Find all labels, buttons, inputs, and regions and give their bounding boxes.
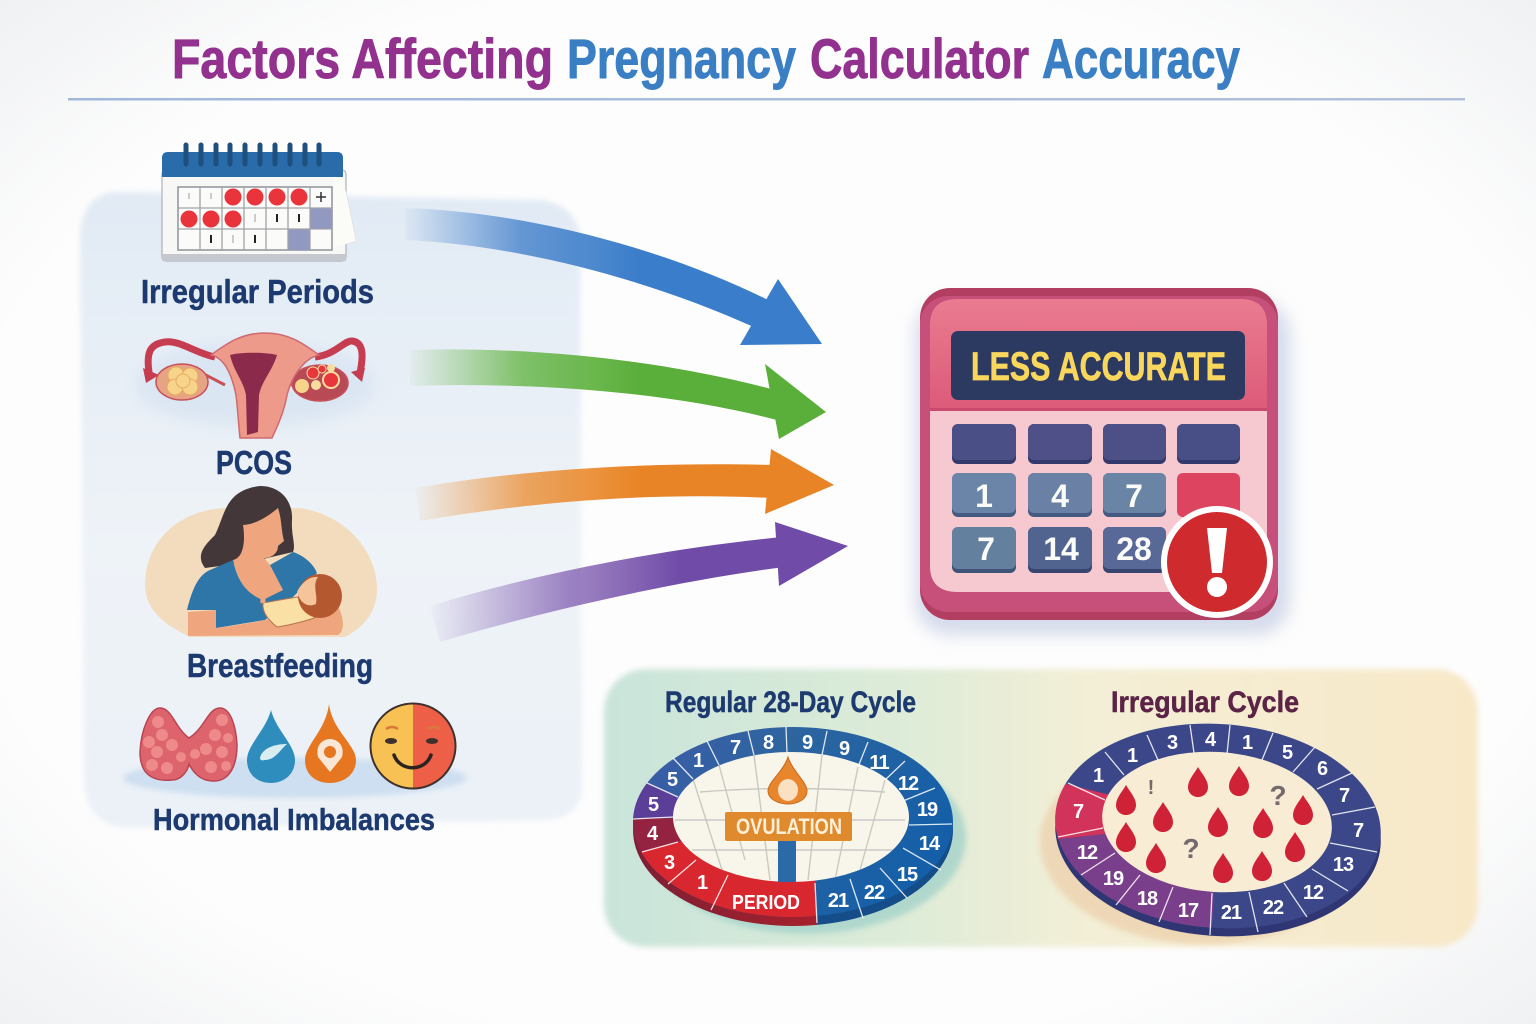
- icons: hormonal imbalance: [123, 703, 467, 798]
- calculator keys: [952, 424, 1240, 573]
- ring numbers: 5: [1282, 742, 1293, 764]
- ring numbers: 14: [919, 833, 941, 855]
- ring numbers: 9: [839, 738, 850, 760]
- title: Calculator: [810, 27, 1029, 90]
- ring numbers: 1: [697, 872, 708, 894]
- calculator keys: 1: [975, 478, 993, 514]
- calculator keys: 14: [1043, 531, 1079, 567]
- icon: irregular periods calendar: [162, 145, 356, 261]
- title: Accuracy: [1042, 27, 1240, 90]
- label: hormonal imbalances: Hormonal Imbalances: [153, 802, 435, 837]
- blood drops: [1116, 766, 1313, 883]
- ovulation marker: [725, 757, 852, 882]
- ring numbers: 1: [1093, 765, 1104, 787]
- question marks: ?: [1269, 780, 1287, 811]
- ring numbers: 13: [1333, 854, 1354, 876]
- ring numbers: 8: [763, 732, 774, 754]
- calculator keys: 4: [1051, 478, 1069, 514]
- panel: factors background: [80, 192, 582, 828]
- calculator keys: 28: [1116, 531, 1152, 567]
- chart: irregular cycle ring: [1038, 724, 1381, 946]
- ring numbers: 21: [1221, 902, 1242, 924]
- question marks: [1148, 777, 1287, 864]
- ring numbers: 19: [917, 799, 938, 821]
- icon: blue drop: [247, 710, 295, 783]
- ring numbers: 7: [1353, 820, 1364, 842]
- panel: cycle comparison background: [604, 669, 1478, 947]
- ring numbers: 3: [664, 852, 675, 874]
- calculator shadow: [915, 300, 1290, 635]
- icon: breastfeeding mother and baby: [145, 486, 377, 637]
- calculator: [915, 288, 1290, 635]
- ring numbers: 7: [1073, 801, 1084, 823]
- ring numbers: 5: [648, 794, 659, 816]
- ring numbers: 1: [693, 750, 704, 772]
- calculator keys: 7: [977, 531, 995, 567]
- arrow: blue: [405, 208, 822, 345]
- question marks: ?: [1182, 833, 1200, 864]
- arrow: green: [410, 349, 826, 439]
- icon: orange drop: [305, 704, 356, 783]
- ovulation marker: OVULATION: [736, 814, 842, 839]
- ring numbers: 7: [730, 737, 741, 759]
- title: Pregnancy: [567, 27, 796, 90]
- title: Factors Affecting: [172, 27, 553, 90]
- ring numbers: 9: [802, 732, 813, 754]
- calculator screen: LESS ACCURATE: [971, 345, 1226, 389]
- label: PCOS: PCOS: [216, 444, 292, 481]
- arrow: purple: [430, 522, 848, 642]
- calculator screen: [951, 331, 1245, 400]
- ring numbers: [647, 732, 941, 914]
- ring numbers: 12: [1077, 842, 1098, 864]
- ring numbers: 15: [897, 864, 918, 886]
- icon: uterus with ovaries: [135, 333, 375, 438]
- label: irregular periods: Irregular Periods: [141, 273, 374, 310]
- ring numbers: 22: [1263, 897, 1284, 919]
- ring numbers: 17: [1178, 900, 1199, 922]
- ring numbers: 11: [869, 752, 889, 774]
- heading: regular cycle: Regular 28-Day Cycle: [665, 686, 916, 719]
- calculator keys: 7: [1125, 478, 1143, 514]
- question marks: !: [1148, 777, 1154, 799]
- ring numbers: 18: [1137, 888, 1158, 910]
- ring numbers: 12: [898, 773, 919, 795]
- ring numbers: 22: [864, 882, 885, 904]
- chart: regular cycle ring: [633, 727, 968, 936]
- icon: warning badge: [1161, 506, 1273, 618]
- icon: half happy face: [370, 703, 456, 789]
- ring numbers: 1: [1242, 732, 1253, 754]
- ring numbers: 4: [647, 823, 659, 845]
- title: [172, 27, 1240, 90]
- ring numbers: 3: [1167, 732, 1178, 754]
- ring numbers: 7: [1339, 785, 1350, 807]
- ring numbers: 19: [1103, 868, 1124, 890]
- ring numbers: 21: [828, 890, 849, 912]
- ring numbers: 1: [1127, 745, 1138, 767]
- icon: thyroid: [140, 708, 237, 781]
- ring numbers: 5: [667, 769, 678, 791]
- ring numbers: PERIOD: [732, 892, 800, 914]
- ring numbers: 6: [1317, 758, 1328, 780]
- ring numbers: [1073, 729, 1364, 924]
- label: breastfeeding: Breastfeeding: [187, 647, 373, 684]
- heading: irregular cycle: Irregular Cycle: [1111, 686, 1299, 719]
- ring numbers: 12: [1303, 882, 1324, 904]
- arrow: orange: [415, 449, 834, 521]
- ring numbers: 4: [1205, 729, 1217, 751]
